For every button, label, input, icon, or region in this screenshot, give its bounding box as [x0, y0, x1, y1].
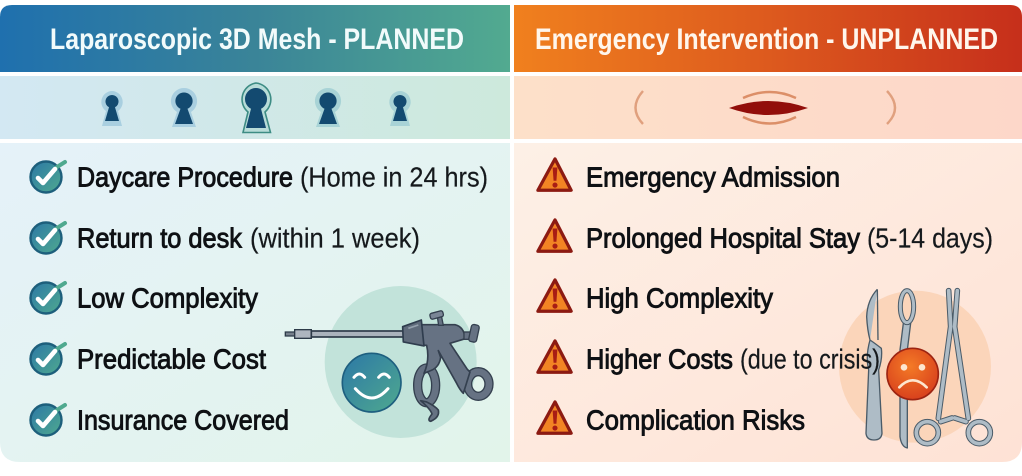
band: keyhole incisions — [0, 76, 510, 139]
panel: unplanned emergency column — [514, 5, 1022, 462]
item: high complexity: High Complexity — [586, 282, 773, 314]
icon: probe — [900, 291, 914, 448]
icon: right bracket mark — [887, 91, 895, 124]
list: unplanned risks — [538, 159, 993, 436]
item: higher costs: Higher Costs — [586, 344, 733, 374]
panel: planned laparoscopic column — [0, 5, 510, 462]
item: insurance covered: Insurance Covered — [77, 404, 289, 436]
illustration: surgical instruments with sad face — [839, 289, 991, 448]
header: planned — [0, 5, 510, 72]
item: predictable cost: Predictable Cost — [77, 344, 266, 374]
icon: open wound — [729, 92, 808, 124]
tool: body and handle arms — [421, 325, 470, 393]
tool: right handle ring — [468, 372, 489, 396]
item: prolonged hospital stay: (5-14 days) — [867, 222, 993, 254]
item: higher costs — [538, 341, 880, 374]
body panel: planned background — [0, 143, 510, 462]
band: open incision — [514, 76, 1022, 139]
item: prolonged hospital stay — [538, 220, 993, 254]
list: planned benefits — [30, 162, 488, 436]
icon: forceps — [916, 291, 990, 444]
item: return to desk: (within 1 week) — [250, 222, 420, 254]
item: return to desk: Return to desk — [77, 222, 243, 254]
item: daycare procedure: (Home in 24 hrs) — [300, 162, 488, 192]
item: daycare procedure: Daycare Procedure — [77, 162, 293, 192]
item: high complexity — [538, 280, 773, 314]
illustration: laparoscopic tool with smiley — [285, 286, 489, 438]
icon: keyhole 5 — [389, 91, 411, 126]
item: return to desk — [30, 222, 420, 254]
tool: left handle ring — [418, 368, 436, 403]
icon: sad face — [887, 348, 938, 400]
icon: keyhole 4 — [315, 88, 341, 127]
item: low complexity: Low Complexity — [77, 282, 258, 314]
icon: keyhole 3 central — [242, 83, 271, 132]
header: planned: Laparoscopic 3D Mesh - PLANNED — [50, 23, 464, 56]
item: complication risks: Complication Risks — [586, 404, 805, 436]
icon: left bracket mark — [636, 91, 643, 124]
item: daycare procedure — [30, 162, 488, 192]
icon: smiley face — [342, 353, 401, 412]
item: emergency admission: Emergency Admission — [586, 162, 840, 192]
item: higher costs: (due to crisis) — [740, 344, 880, 374]
header: unplanned — [514, 5, 1022, 72]
icon: keyhole 1 — [101, 91, 123, 126]
body panel: unplanned background — [514, 143, 1022, 462]
icon: keyhole 2 — [171, 88, 197, 127]
icon: scalpel — [866, 289, 882, 440]
item: prolonged hospital stay: Prolonged Hospital Stay — [586, 222, 860, 254]
